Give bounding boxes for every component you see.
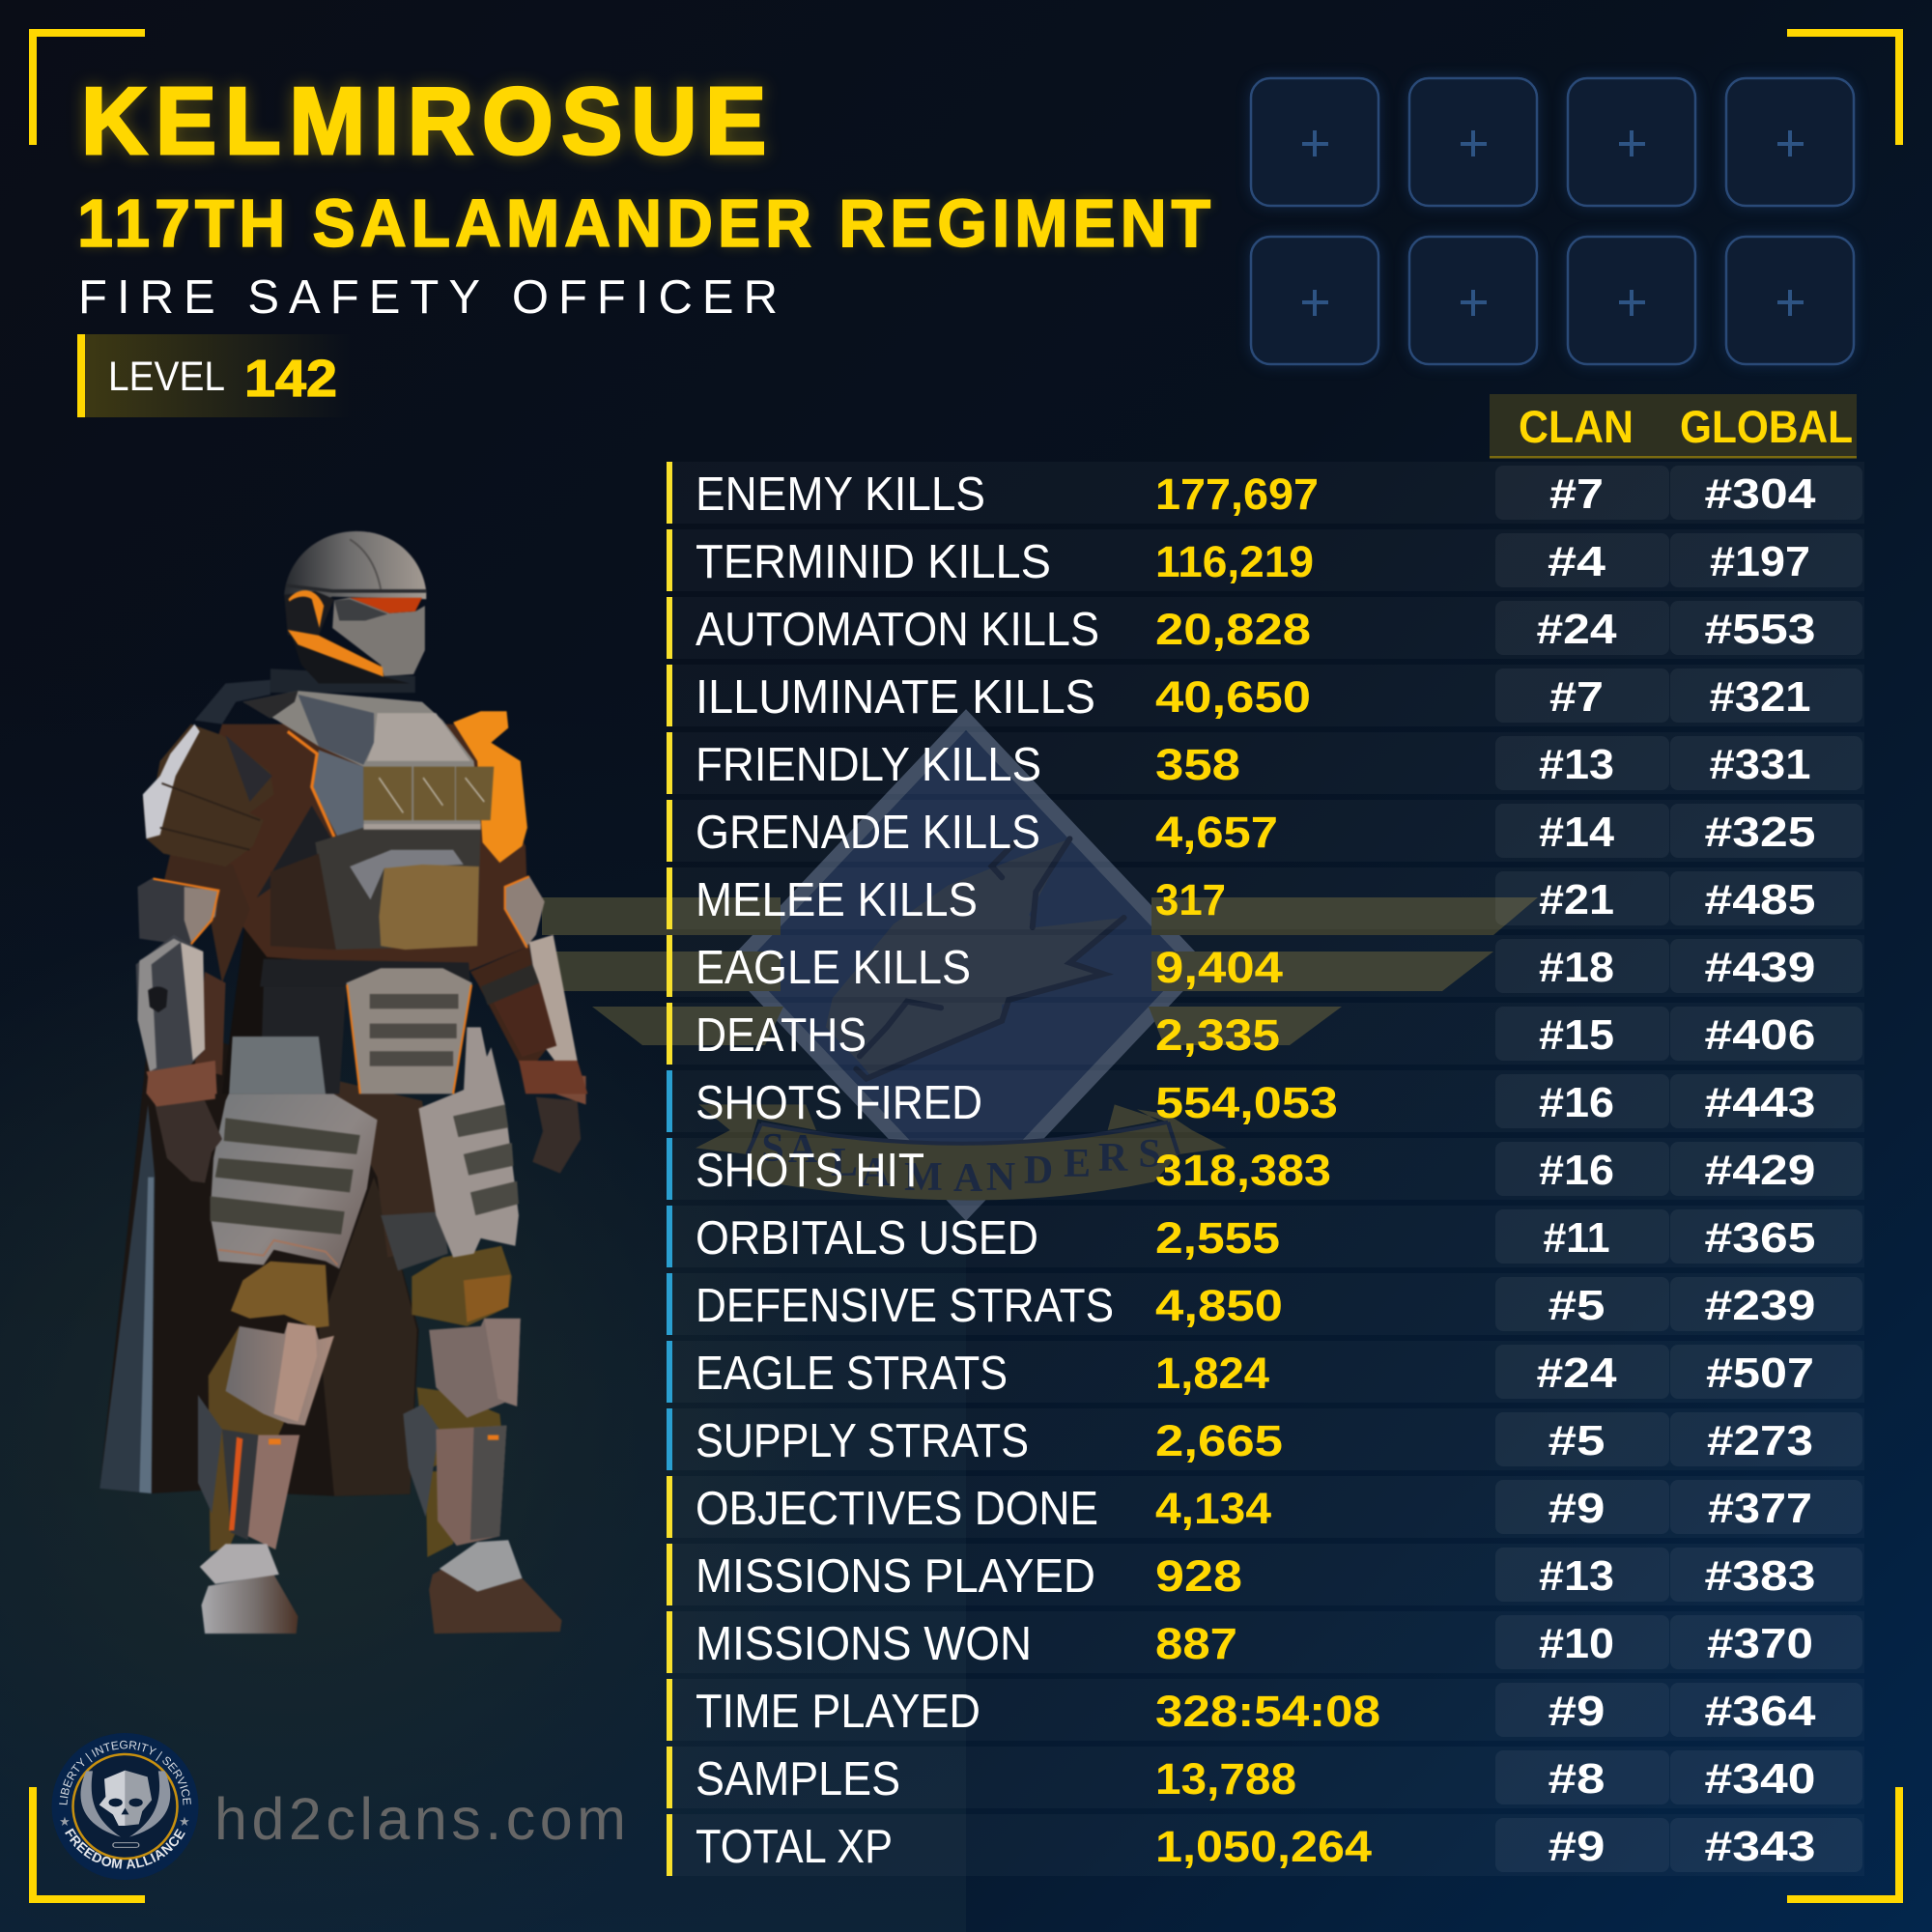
row: total xp: #9 xyxy=(1548,1823,1605,1870)
row: time played: 328:54:08 xyxy=(1155,1687,1380,1736)
row: eagle kills: #439 xyxy=(1704,944,1816,991)
row: terminid kills: #4 xyxy=(1548,538,1606,585)
row: time played xyxy=(667,1679,1864,1741)
row: missions won: #370 xyxy=(1707,1620,1813,1667)
row: illuminate kills: ILLUMINATE KILLS xyxy=(696,671,1095,724)
row: missions won: MISSIONS WON xyxy=(696,1618,1032,1670)
row: samples: #8 xyxy=(1548,1755,1605,1803)
row: terminid kills: #197 xyxy=(1710,538,1810,585)
watermark: salamanders regiment emblem: SALAMANDERS xyxy=(761,1126,1161,1201)
level badge: LEVEL xyxy=(108,354,225,400)
logo: freedom alliance seal: ★ xyxy=(179,1814,190,1829)
table header: clan and global: GLOBAL xyxy=(1680,401,1853,452)
row: melee kills xyxy=(667,867,1864,929)
row: objectives done: 4,134 xyxy=(1155,1484,1271,1533)
row: eagle strats xyxy=(667,1341,1864,1403)
row: automaton kills: #553 xyxy=(1704,606,1816,653)
row: grenade kills: GRENADE KILLS xyxy=(696,807,1040,859)
row: terminid kills xyxy=(667,529,1864,591)
row: friendly kills: #331 xyxy=(1710,741,1810,788)
row: deaths: #15 xyxy=(1539,1011,1614,1059)
table header: clan and global xyxy=(1490,394,1857,458)
row: supply strats: 2,665 xyxy=(1155,1416,1283,1465)
stats table xyxy=(667,462,1864,1876)
row: automaton kills xyxy=(667,597,1864,659)
watermark: salamanders regiment emblem xyxy=(542,720,1538,1210)
row: automaton kills: #24 xyxy=(1536,606,1617,653)
row: eagle kills xyxy=(667,935,1864,997)
level badge: 142 xyxy=(244,350,337,408)
row: orbitals used: 2,555 xyxy=(1155,1213,1280,1263)
title: KELMIROSUE xyxy=(81,68,775,174)
row: orbitals used: ORBITALS USED xyxy=(696,1212,1038,1264)
row: friendly kills: 358 xyxy=(1155,740,1240,789)
row: deaths xyxy=(667,1003,1864,1065)
row: friendly kills xyxy=(667,732,1864,794)
row: samples xyxy=(667,1747,1864,1808)
row: illuminate kills: 40,650 xyxy=(1155,672,1311,722)
corner bracket: bottom left xyxy=(29,1787,145,1903)
soldier figure xyxy=(99,531,587,1634)
row: melee kills: 317 xyxy=(1155,875,1226,924)
row: defensive strats: 4,850 xyxy=(1155,1281,1283,1330)
row: objectives done: #9 xyxy=(1548,1485,1605,1532)
row: supply strats: SUPPLY STRATS xyxy=(696,1415,1029,1467)
row: defensive strats: #239 xyxy=(1704,1282,1816,1329)
row: enemy kills: 177,697 xyxy=(1155,469,1319,519)
row: automaton kills: AUTOMATON KILLS xyxy=(696,604,1099,656)
rank title: FIRE SAFETY OFFICER xyxy=(78,271,778,324)
row: defensive strats: DEFENSIVE STRATS xyxy=(696,1280,1114,1332)
row: total xp: TOTAL XP xyxy=(696,1821,893,1873)
row: deaths: #406 xyxy=(1704,1011,1816,1059)
logo: freedom alliance seal: FREEDOM ALLIANCE xyxy=(65,1828,185,1869)
row: defensive strats: #5 xyxy=(1548,1282,1605,1329)
row: time played: #9 xyxy=(1548,1688,1605,1735)
row: shots hit: #429 xyxy=(1704,1147,1816,1194)
row: supply strats: #5 xyxy=(1548,1417,1605,1464)
row: eagle strats: 1,824 xyxy=(1155,1349,1269,1398)
row: illuminate kills xyxy=(667,665,1864,726)
row: objectives done: OBJECTIVES DONE xyxy=(696,1483,1098,1535)
row: eagle kills: 9,404 xyxy=(1155,943,1283,992)
row: shots hit xyxy=(667,1138,1864,1200)
row: orbitals used: #365 xyxy=(1704,1214,1816,1262)
row: missions played xyxy=(667,1544,1864,1605)
corner bracket: bottom right xyxy=(1787,1787,1903,1903)
row: time played: TIME PLAYED xyxy=(696,1686,980,1738)
row: deaths: 2,335 xyxy=(1155,1010,1280,1060)
row: missions played: #383 xyxy=(1704,1552,1816,1600)
row: terminid kills: 116,219 xyxy=(1155,537,1314,586)
row: melee kills: #485 xyxy=(1704,876,1816,923)
row: missions won: 887 xyxy=(1155,1619,1237,1668)
row: terminid kills: TERMINID KILLS xyxy=(696,536,1051,588)
row: shots fired xyxy=(667,1070,1864,1132)
row: missions won xyxy=(667,1611,1864,1673)
row: objectives done xyxy=(667,1476,1864,1538)
row: eagle kills: #18 xyxy=(1539,944,1614,991)
row: eagle strats: #24 xyxy=(1536,1350,1617,1397)
corner bracket: top left xyxy=(29,29,145,145)
row: samples: 13,788 xyxy=(1155,1754,1296,1804)
row: shots fired: 554,053 xyxy=(1155,1078,1338,1127)
row: shots fired: #443 xyxy=(1704,1079,1816,1126)
row: illuminate kills: #7 xyxy=(1549,673,1604,721)
row: missions won: #10 xyxy=(1539,1620,1614,1667)
logo: freedom alliance seal: ★ xyxy=(59,1814,71,1829)
row: melee kills: MELEE KILLS xyxy=(696,874,978,926)
row: defensive strats xyxy=(667,1273,1864,1335)
row: supply strats xyxy=(667,1408,1864,1470)
row: grenade kills: #325 xyxy=(1704,809,1816,856)
row: missions played: 928 xyxy=(1155,1551,1242,1601)
row: eagle strats: EAGLE STRATS xyxy=(696,1348,1008,1400)
row: automaton kills: 20,828 xyxy=(1155,605,1311,654)
row: missions played: #13 xyxy=(1539,1552,1614,1600)
row: friendly kills: FRIENDLY KILLS xyxy=(696,739,1041,791)
row: grenade kills: #14 xyxy=(1539,809,1615,856)
empty medal slots xyxy=(1251,78,1854,364)
row: eagle strats: #507 xyxy=(1706,1350,1814,1397)
row: shots hit: #16 xyxy=(1539,1147,1614,1194)
row: total xp: 1,050,264 xyxy=(1155,1822,1372,1871)
row: total xp: #343 xyxy=(1704,1823,1816,1870)
row: shots fired: SHOTS FIRED xyxy=(696,1077,982,1129)
row: melee kills: #21 xyxy=(1539,876,1614,923)
table header: clan and global: CLAN xyxy=(1519,401,1634,452)
row: eagle kills: EAGLE KILLS xyxy=(696,942,971,994)
row: enemy kills: #7 xyxy=(1549,470,1604,518)
row: illuminate kills: #321 xyxy=(1710,673,1810,721)
row: grenade kills: 4,657 xyxy=(1155,808,1278,857)
row: deaths: DEATHS xyxy=(696,1009,867,1062)
corner bracket: top right xyxy=(1787,29,1903,145)
row: shots hit: SHOTS HIT xyxy=(696,1145,924,1197)
row: supply strats: #273 xyxy=(1707,1417,1813,1464)
row: shots hit: 318,383 xyxy=(1155,1146,1331,1195)
row: samples: SAMPLES xyxy=(696,1753,900,1805)
row: enemy kills xyxy=(667,462,1864,524)
row: samples: #340 xyxy=(1704,1755,1816,1803)
row: total xp xyxy=(667,1814,1864,1876)
row: orbitals used: #11 xyxy=(1544,1214,1609,1262)
row: orbitals used xyxy=(667,1206,1864,1267)
website name: hd2clans.com xyxy=(214,1786,626,1852)
row: friendly kills: #13 xyxy=(1539,741,1614,788)
row: missions played: MISSIONS PLAYED xyxy=(696,1550,1095,1603)
clan name heading: 117TH SALAMANDER REGIMENT xyxy=(77,185,1215,261)
logo: freedom alliance seal: LIBERTY | INTEGRITY | SERVICE xyxy=(59,1741,191,1805)
row: grenade kills xyxy=(667,800,1864,862)
row: shots fired: #16 xyxy=(1539,1079,1614,1126)
row: objectives done: #377 xyxy=(1708,1485,1812,1532)
row: enemy kills: #304 xyxy=(1704,470,1816,518)
logo: freedom alliance seal xyxy=(52,1733,199,1880)
row: time played: #364 xyxy=(1704,1688,1816,1735)
row: enemy kills: ENEMY KILLS xyxy=(696,469,985,521)
level badge xyxy=(77,334,353,417)
